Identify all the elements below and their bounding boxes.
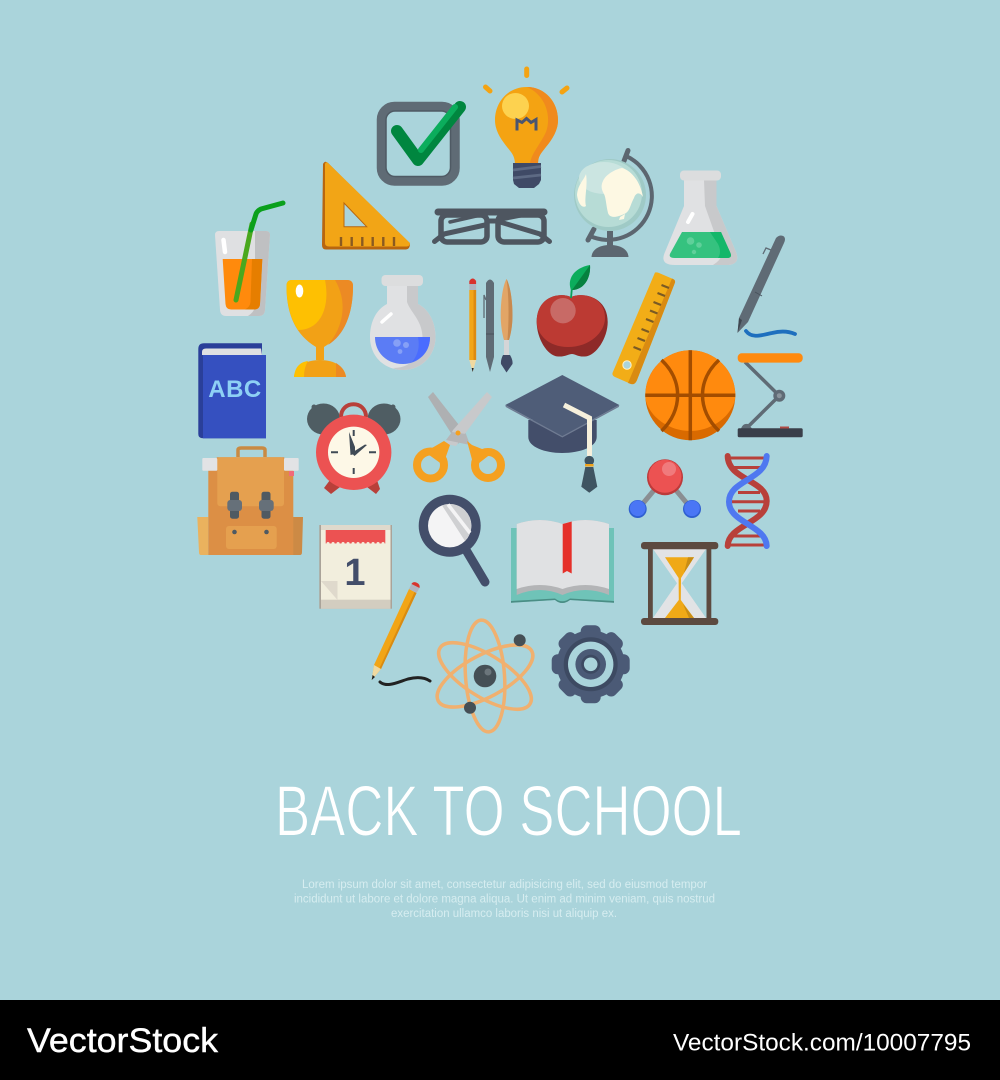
icon: checkbox with green tick	[382, 106, 460, 181]
footer watermark bar	[0, 1000, 1000, 1080]
icon: magnifying glass	[419, 495, 485, 582]
icon: backpack	[197, 448, 303, 555]
icon: pencil writing a black line	[372, 582, 430, 685]
icon: eyeglasses	[434, 212, 550, 242]
icon: tear-off calendar: 1	[344, 552, 366, 594]
icon: alarm clock	[307, 404, 400, 494]
body text: incididunt ut labore et dolore magna aliqua. Ut enim ad minim veniam, quis nostrud	[294, 894, 715, 906]
icon: molecule	[629, 459, 701, 518]
body text	[294, 879, 715, 920]
icon: yellow ruler	[612, 272, 675, 384]
icon: DNA double helix	[728, 456, 767, 546]
icon: gear	[552, 625, 630, 703]
title: BACK TO SCHOOL	[275, 772, 742, 852]
icon: desk lamp shaped like sigma	[738, 353, 803, 437]
icon: conical flask with green liquid	[663, 170, 737, 265]
icon: tear-off calendar	[319, 525, 392, 609]
icon: blue ABC book: ABC	[208, 376, 262, 403]
icon: round flask with blue liquid	[370, 275, 436, 370]
icon: atom	[428, 619, 542, 733]
icon: scissors	[417, 392, 501, 478]
body text: exercitation ullamco laboris nisi ut aliquip ex.	[391, 908, 617, 920]
icon: globe	[574, 150, 652, 257]
icon: pen with blue squiggle	[738, 236, 795, 336]
icon: graduation cap	[505, 375, 619, 493]
icon: open book with bookmark	[511, 520, 614, 603]
footer watermark bar: VectorStock.com/10007795	[673, 1030, 971, 1056]
icon: basketball	[645, 350, 735, 440]
icon: light bulb	[486, 69, 567, 188]
icon: set square triangle	[322, 162, 410, 250]
icon: red apple with leaf	[537, 265, 608, 357]
footer watermark bar: VectorStock	[27, 1022, 219, 1060]
icon: pencil, pen and paintbrush	[469, 278, 513, 372]
body text: Lorem ipsum dolor sit amet, consectetur adipisicing elit, sed do eiusmod tempor	[302, 879, 707, 891]
icon: golden trophy cup	[286, 280, 353, 377]
icon: blue ABC book	[198, 343, 266, 438]
icon: hourglass	[641, 542, 718, 625]
icon: juice glass with straw	[215, 203, 283, 316]
